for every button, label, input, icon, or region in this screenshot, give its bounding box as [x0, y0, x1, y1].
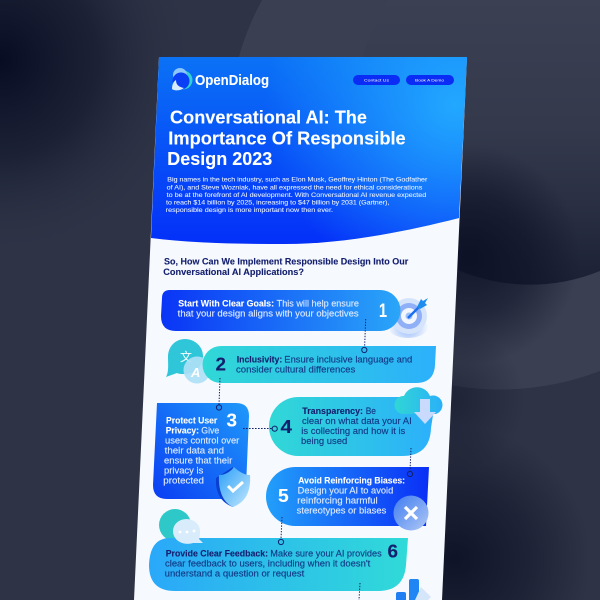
section heading — [163, 257, 409, 277]
intro paragraph: to be at the forefront of AI development. With Conversational AI revenue expected — [167, 192, 427, 199]
icon: translate bubbles — [166, 339, 210, 384]
step 3 pill: privacy is — [164, 465, 204, 475]
intro paragraph: Big names in the tech industry, such as Elon Musk, Geoffrey Hinton (The Godfather — [167, 177, 428, 184]
step 4 pill: clear on what data your AI — [302, 416, 412, 426]
step 5 pill: stereotypes or biases — [297, 506, 387, 516]
connector 4 to 5 — [407, 448, 413, 477]
step 2 pill: consider cultural differences — [236, 364, 356, 374]
step 4 pill: Transparency: — [302, 406, 363, 416]
step 3 pill — [153, 403, 249, 499]
button: contact us: Contact Us — [364, 78, 389, 82]
title: Importance Of Responsible — [168, 127, 406, 148]
header panel — [151, 57, 467, 244]
step 1 pill — [161, 290, 400, 331]
intro paragraph: to reach $14 billion by 2025, increasing to $47 billion by 2031 (Gartner), — [166, 199, 390, 206]
connector 5 to 6 — [278, 517, 284, 545]
connector 2 to 3 — [216, 378, 222, 410]
step 3 pill: 3 — [226, 410, 237, 430]
connector 1 to 2 — [365, 319, 366, 347]
icon: bar chart — [396, 579, 431, 600]
step 6 pill: 6 — [388, 542, 398, 562]
button: contact us — [353, 75, 400, 85]
step 5 pill: Avoid Reinforcing Biases: — [298, 476, 405, 486]
icon: chat bubble — [173, 519, 203, 544]
icon: translate bubbles: A — [190, 365, 200, 380]
step 3 pill: users control over — [165, 435, 239, 445]
step 4 pill: is collecting and how it is — [301, 426, 406, 436]
step 6 pill — [149, 538, 408, 591]
icon: logo mark — [172, 68, 192, 90]
step 3 pill: Protect User — [166, 415, 218, 425]
step 1 pill: 1 — [379, 301, 387, 322]
step 6 pill: Make sure your AI provides — [270, 549, 382, 559]
icon: target with arrow — [388, 298, 428, 338]
icon: translate bubbles: 文 — [180, 349, 192, 364]
step 1 pill: This will help ensure — [277, 299, 359, 309]
step 3 pill: ensure that their — [164, 455, 232, 465]
icon: chat teal backing — [159, 509, 191, 541]
logo wordmark: OpenDialog — [195, 72, 269, 89]
logo — [172, 68, 269, 90]
step 5 pill — [266, 467, 429, 526]
icon: x mark circle — [394, 496, 428, 530]
step 3 pill: their data and — [165, 445, 224, 455]
step 5 pill: reinforcing harmful — [297, 496, 378, 506]
step 3 pill: Give — [201, 425, 219, 435]
page sheet — [134, 57, 467, 600]
step 1 pill: Start With Clear Goals: — [178, 299, 274, 309]
button: book a demo — [406, 75, 454, 85]
step 2 pill: Ensure inclusive language and — [284, 355, 412, 365]
step 6 pill: understand a question or request — [165, 569, 305, 579]
infographic page — [134, 57, 467, 600]
step 4 pill: 4 — [280, 417, 292, 437]
icon: shield with check — [216, 467, 250, 507]
step 1 pill: that your design aligns with your objectives — [178, 309, 359, 319]
connector 3 to 4 — [243, 426, 277, 431]
step 4 pill — [269, 397, 433, 456]
title: Design 2023 — [167, 148, 272, 169]
step 3 pill: protected — [163, 475, 204, 485]
title — [167, 106, 406, 169]
step 5 pill: 5 — [278, 486, 289, 506]
icon: cloud download — [394, 387, 442, 424]
button: book a demo: Book A Demo — [415, 78, 445, 82]
step 4 pill: being used — [301, 436, 347, 446]
step 6 pill: Provide Clear Feedback: — [166, 549, 268, 559]
step 2 pill: 2 — [216, 354, 226, 374]
step 2 pill — [203, 346, 436, 383]
step 5 pill: Design your AI to avoid — [298, 486, 393, 496]
intro paragraph: responsible design is more important now then ever. — [166, 207, 333, 214]
section heading: So, How Can We Implement Responsible Design Into Our — [164, 257, 409, 267]
step 6 pill: clear feedback to users, including when it doesn't — [165, 559, 371, 569]
step 4 pill: Be — [366, 406, 376, 416]
step 2 pill: Inclusivity: — [237, 355, 282, 365]
connector 6 to 7 — [359, 583, 360, 600]
intro paragraph: of AI), and Steve Wozniak, have all expressed the need for ethical considerations — [167, 184, 423, 191]
intro paragraph — [166, 177, 428, 214]
step 3 pill: Privacy: — [166, 425, 199, 435]
title: Conversational AI: The — [170, 106, 367, 127]
section heading: Conversational AI Applications? — [163, 267, 304, 277]
